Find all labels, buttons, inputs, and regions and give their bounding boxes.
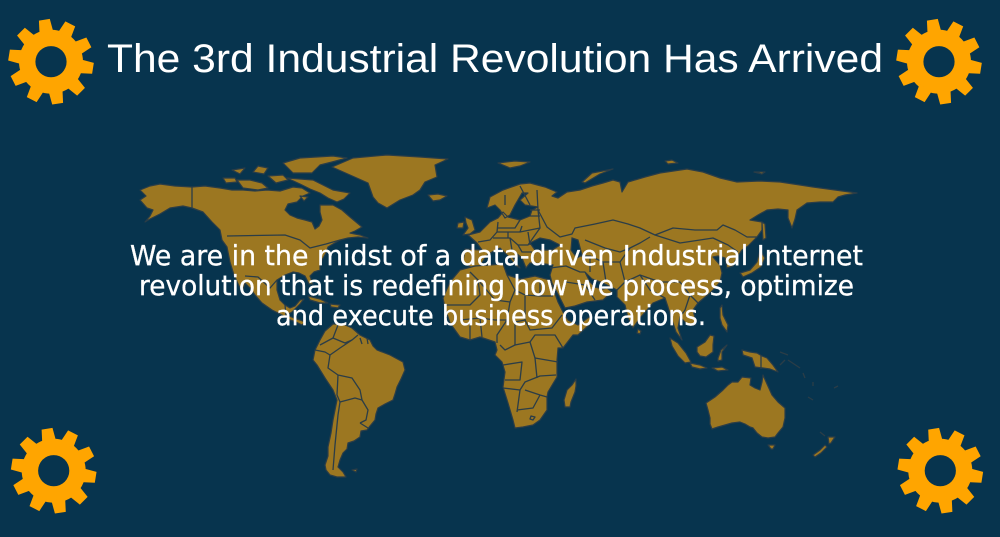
Iceland: [428, 194, 447, 201]
Pacific islands: [788, 360, 838, 436]
New Zealand: [828, 437, 835, 444]
Asia borders: [537, 190, 757, 237]
Greenland: [332, 155, 448, 208]
Madagascar: [564, 379, 576, 407]
Africa: [443, 264, 592, 428]
title: The 3rd Industrial Revolution Has Arrived: [107, 37, 883, 81]
Caspian Sea: [571, 238, 582, 258]
Eurasia: [463, 169, 857, 340]
Tasmania: [768, 445, 775, 449]
gear: top right: [896, 19, 982, 105]
body text: [130, 240, 863, 332]
South America: [313, 324, 405, 477]
North America: [140, 156, 368, 325]
body text: and execute business operations.: [276, 300, 706, 332]
Australia: [706, 375, 785, 438]
body text: revolution that is redefining how we process, optimize: [139, 270, 854, 302]
Europe borders: [478, 222, 498, 242]
gear: bottom right: [897, 428, 983, 514]
Black Sea: [530, 238, 560, 250]
Southeast Asia islands: [670, 305, 728, 371]
Northern islands: [498, 161, 530, 168]
gear: bottom left: [11, 428, 97, 514]
body text: We are in the midst of a data-driven Industrial Internet: [130, 240, 863, 272]
Arctic islands: [287, 178, 350, 202]
world map: [140, 155, 857, 477]
Sakhalin and Japan: [762, 222, 766, 240]
Great Britain and Ireland: [463, 217, 475, 235]
Caribbean: [308, 296, 328, 303]
New Guinea: [742, 350, 788, 372]
gear: top left: [8, 19, 94, 105]
Sri Lanka: [637, 329, 641, 334]
